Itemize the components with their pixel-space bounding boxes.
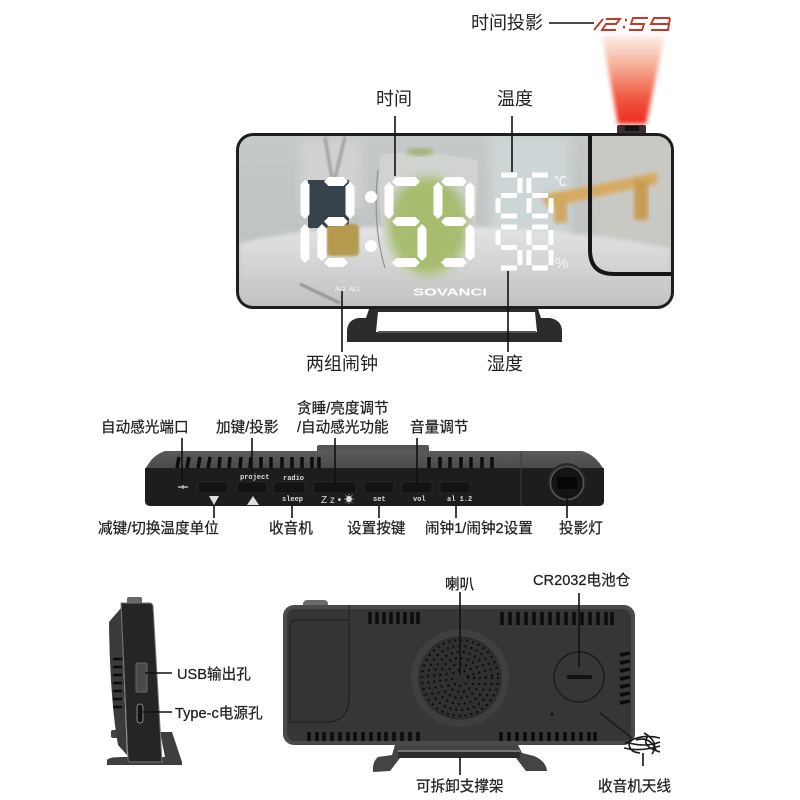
- control strip labels top: 加键/投影: [216, 419, 279, 436]
- back labels: 喇叭: [445, 576, 475, 593]
- button captions: Z z • ☀: [321, 494, 354, 506]
- label: time projection: 时间投影: [471, 13, 543, 33]
- back view of clock: [283, 600, 635, 745]
- control strip leader lines: [182, 438, 567, 518]
- projection lens knob: [548, 463, 586, 501]
- side port labels: USB输出孔: [177, 666, 251, 683]
- vent slots: [177, 457, 492, 468]
- clock front body with mirror: [236, 133, 674, 309]
- control strip labels top: 自动感光端口: [101, 419, 189, 436]
- back leader lines: [460, 592, 643, 775]
- leader lines front: [342, 116, 512, 352]
- back labels: CR2032电池仓: [533, 572, 631, 589]
- control strip labels top: [101, 400, 468, 436]
- radio antenna wire: [600, 713, 660, 754]
- label: time: 时间: [376, 89, 412, 109]
- button captions: [209, 474, 472, 506]
- brand logo: SOVANCI: [413, 288, 487, 298]
- projected red time display: [594, 18, 670, 30]
- control strip labels bottom: 闹钟1/闹钟2设置: [425, 520, 533, 537]
- light sensor port: [178, 485, 188, 489]
- LED temperature and humidity digits: [498, 175, 551, 268]
- unit symbols: [554, 174, 568, 272]
- control strip labels top: 音量调节: [410, 419, 468, 436]
- control strip labels bottom: 减键/切换温度单位: [98, 520, 219, 537]
- side port labels: Type-c电源孔: [175, 705, 263, 722]
- battery cover: [554, 652, 604, 702]
- control strip labels bottom: [98, 520, 603, 537]
- buttons: [198, 482, 470, 493]
- side port labels: [143, 666, 263, 722]
- projector window outline: [590, 135, 672, 274]
- back labels: [416, 572, 671, 795]
- mirror reflection scene: [239, 136, 672, 306]
- alarm indicators: AL1 AL2: [335, 287, 360, 293]
- label: time projection: [471, 13, 594, 33]
- button captions: vol: [413, 496, 426, 504]
- back labels: 收音机天线: [598, 778, 671, 795]
- back view stand: [373, 745, 547, 772]
- button captions: radio: [283, 475, 304, 483]
- label: temperature: 温度: [497, 89, 533, 109]
- button captions: al 1.2: [447, 496, 472, 504]
- vent groups: [370, 612, 612, 625]
- control strip labels bottom: 设置按键: [347, 520, 406, 537]
- speaker grille: [411, 629, 509, 727]
- button captions: set: [373, 496, 386, 504]
- projector lens on top of clock: [617, 125, 646, 134]
- unit symbols: %: [555, 255, 568, 272]
- clock stand front: [347, 306, 562, 342]
- label: two alarms: 两组闹钟: [306, 354, 378, 374]
- unit symbols: ℃: [554, 174, 567, 189]
- Type-C port: [137, 704, 143, 723]
- control strip labels bottom: 投影灯: [559, 520, 603, 537]
- control strip labels bottom: 收音机: [269, 520, 313, 537]
- side view of clock: [107, 597, 182, 765]
- button captions: sleep: [282, 496, 303, 504]
- back labels: 可拆卸支撑架: [416, 778, 504, 795]
- control strip labels top: /自动感光功能: [297, 419, 389, 436]
- label: humidity: 湿度: [487, 354, 523, 374]
- top edge view of clock: [145, 445, 604, 506]
- projection light beam: [602, 35, 665, 124]
- LED hour and minute digits: [300, 177, 474, 267]
- USB port: [136, 663, 147, 692]
- control strip labels top: 贪睡/亮度调节: [297, 400, 389, 417]
- button captions: project: [240, 474, 269, 482]
